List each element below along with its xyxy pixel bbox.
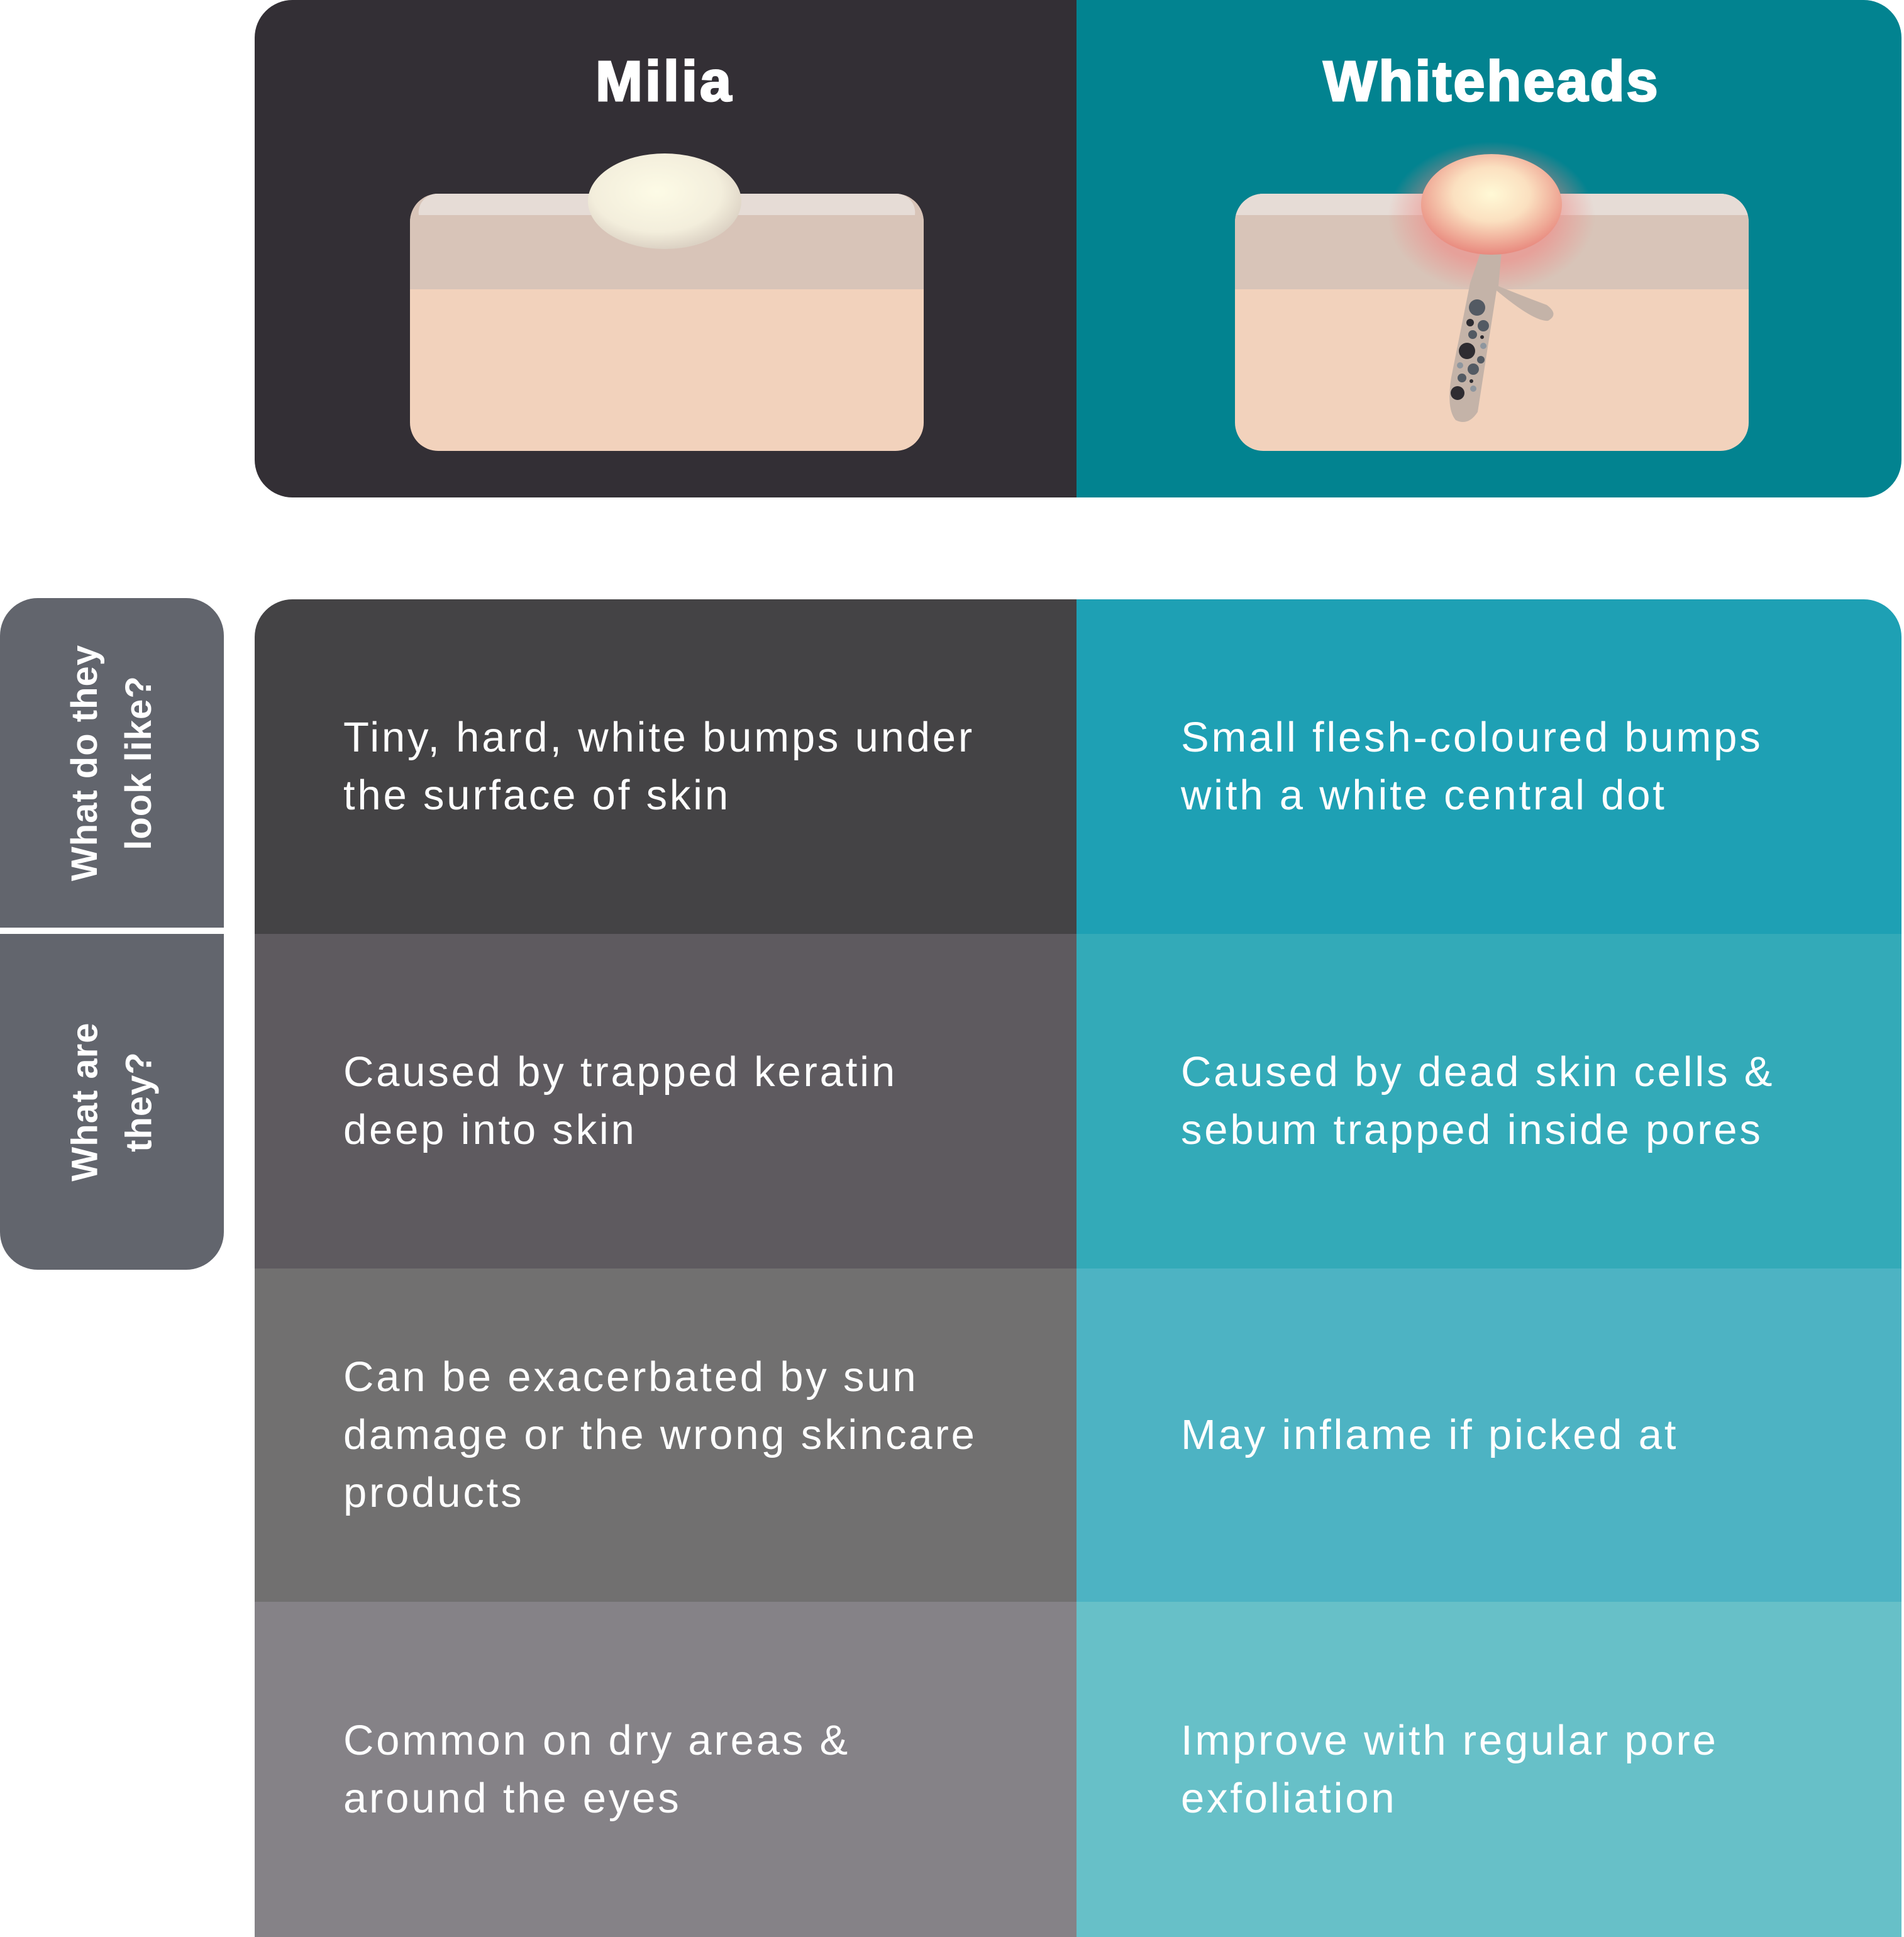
row 4 right <box>1077 1602 1901 1937</box>
row 3 left: Can be exacerbated by sun <box>343 1353 918 1401</box>
row 2 right <box>1077 934 1901 1268</box>
side label: what are they: they? <box>118 1052 159 1152</box>
row 3 left: products <box>343 1469 524 1516</box>
title: Milia: Milia <box>595 50 734 113</box>
row 3 left: damage or the wrong skincare <box>343 1411 977 1458</box>
row 4 left: around the eyes <box>343 1775 682 1821</box>
row 2 right: sebum trapped inside pores <box>1181 1106 1763 1153</box>
row 3 right <box>1077 1268 1901 1602</box>
row 4 left <box>255 1602 1077 1937</box>
row 4 right: exfoliation <box>1181 1775 1397 1821</box>
row 1 right <box>1077 599 1901 934</box>
row 1 right: with a white central dot <box>1181 772 1667 819</box>
row 4 left: Common on dry areas & <box>343 1717 850 1763</box>
row 3 right: May inflame if picked at <box>1181 1411 1678 1458</box>
row 2 left: deep into skin <box>343 1106 637 1153</box>
comparison table <box>255 599 1901 1937</box>
row 2 right: Caused by dead skin cells & <box>1181 1048 1774 1096</box>
side label: what are they: What are <box>64 1023 105 1181</box>
row 2 left <box>255 934 1077 1268</box>
illustration: milia skin <box>410 153 924 451</box>
side label: what do they look like: What do they <box>64 645 105 881</box>
row 1 right: Small flesh-coloured bumps <box>1181 714 1763 761</box>
top panel <box>255 0 1901 497</box>
row 2 left: Caused by trapped keratin <box>343 1048 897 1096</box>
title: Whiteheads: Whiteheads <box>1323 50 1660 113</box>
row 1 left: Tiny, hard, white bumps under <box>343 714 975 761</box>
side label: what do they look like: look like? <box>118 675 159 850</box>
row 1 left: the surface of skin <box>343 772 731 819</box>
side label: what do they look like <box>0 598 224 928</box>
row 1 left <box>255 599 1077 934</box>
illustration: whitehead skin <box>1235 142 1749 451</box>
row 4 right: Improve with regular pore <box>1181 1717 1719 1763</box>
side label: what are they <box>0 934 224 1270</box>
row 3 left <box>255 1268 1077 1602</box>
